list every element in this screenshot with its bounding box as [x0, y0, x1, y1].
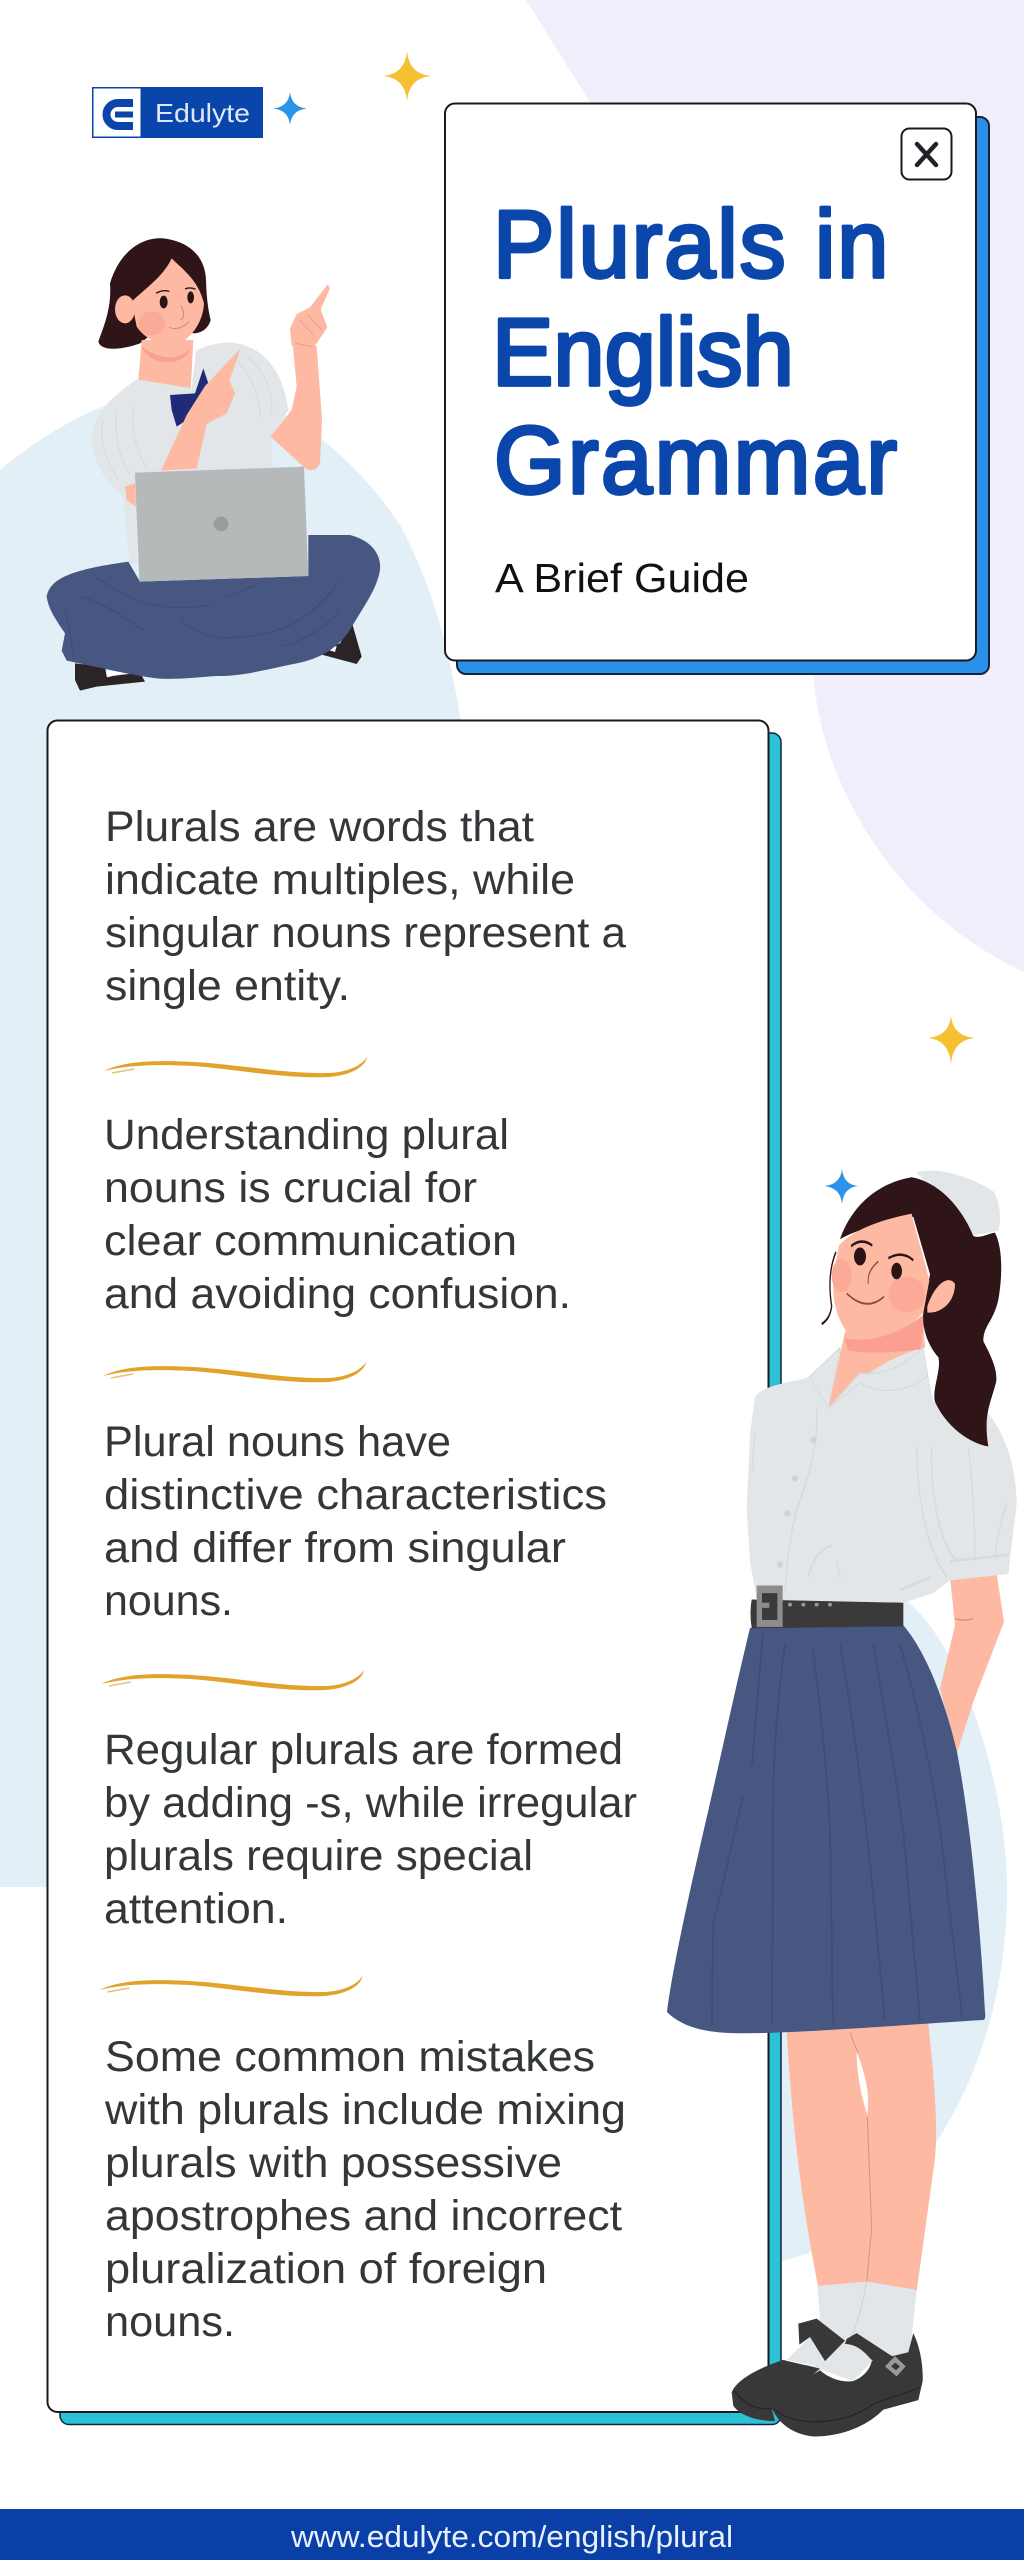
- blush: [138, 311, 165, 335]
- text block 2: and avoiding confusion.: [104, 1270, 571, 1318]
- icon: yellow sparkle right: [928, 1016, 975, 1064]
- right shoe: [319, 622, 362, 664]
- background: lavender blob: [526, 0, 1024, 972]
- text block 4: by adding -s, while irregular: [104, 1779, 637, 1827]
- illustration: standing girl: [667, 1171, 1017, 2436]
- title: [492, 190, 897, 513]
- pointing arm: [161, 348, 241, 471]
- tie: [170, 368, 208, 427]
- divider 4: [100, 1976, 362, 1996]
- arm: [940, 1574, 1004, 1754]
- text block 5: pluralization of foreign: [105, 2245, 547, 2293]
- ear: [115, 295, 135, 323]
- text block 3: nouns.: [104, 1577, 233, 1625]
- title: Grammar: [494, 406, 897, 513]
- text block 1: [105, 803, 626, 1010]
- text block 1: Plurals are words that: [105, 803, 534, 851]
- title card: [445, 104, 976, 660]
- nose and mouth: [847, 1261, 884, 1304]
- text block 4: attention.: [104, 1885, 288, 1933]
- skirt: [47, 535, 380, 679]
- text block 3: distinctive characteristics: [104, 1471, 607, 1519]
- divider 2: [103, 1362, 366, 1382]
- hair back: [98, 238, 211, 349]
- raised arm: [271, 343, 322, 470]
- blush: [832, 1259, 852, 1292]
- skirt: [667, 1625, 985, 2033]
- text block 2: Understanding plural: [104, 1111, 509, 1159]
- buttons: [777, 1437, 816, 1568]
- icon: close button: [902, 128, 952, 180]
- shoe buckle: [885, 2356, 906, 2376]
- text block 5: nouns.: [105, 2298, 235, 2346]
- title: English: [492, 298, 794, 405]
- text block 1: single entity.: [105, 962, 350, 1010]
- text block 5: with plurals include mixing: [104, 2086, 626, 2134]
- neck: [138, 340, 193, 390]
- text block 3: and differ from singular: [104, 1524, 566, 1572]
- footer bar: [0, 2509, 1024, 2560]
- neck: [828, 1325, 925, 1408]
- strap back: [798, 2319, 845, 2361]
- eyes: [160, 296, 168, 308]
- strap front: [845, 2333, 907, 2383]
- laptop: [135, 467, 308, 582]
- text block 2: [104, 1111, 571, 1318]
- icon: yellow sparkle top: [383, 51, 431, 101]
- text block 5: apostrophes and incorrect: [105, 2192, 622, 2240]
- title card shadow: [457, 117, 989, 674]
- eyes: [854, 1247, 866, 1265]
- footer url: www.edulyte.com/english/plural: [290, 2519, 733, 2554]
- illustration: girl with laptop: [47, 238, 380, 691]
- hair strand: [822, 1252, 836, 1324]
- title: Plurals in: [493, 190, 888, 297]
- logo: Edulyte: [92, 87, 263, 138]
- icon: blue sparkle near logo: [273, 92, 307, 125]
- ear: [927, 1280, 955, 1313]
- text block 4: plurals require special: [104, 1832, 533, 1880]
- subtitle: A Brief Guide: [495, 555, 749, 601]
- belt buckle: [757, 1586, 783, 1627]
- background: left light blue blob: [0, 390, 462, 1887]
- skirt pleats: [712, 1631, 962, 2025]
- back shoe: [732, 2360, 820, 2421]
- text block 2: nouns is crucial for: [104, 1164, 477, 1212]
- legs and shoes: [732, 2023, 936, 2436]
- collar: [828, 1348, 927, 1408]
- text block 3: [104, 1418, 607, 1625]
- socks: [787, 2281, 917, 2381]
- face: [132, 258, 204, 345]
- divider 3: [101, 1670, 364, 1690]
- text block 5: [104, 2033, 626, 2346]
- text block 4: [104, 1726, 637, 1933]
- main panel shadow: [60, 733, 781, 2424]
- text block 1: singular nouns represent a: [105, 909, 626, 957]
- front shoe: [772, 2333, 923, 2436]
- belt: [750, 1600, 903, 1628]
- face: [833, 1214, 929, 1337]
- logo: Edulyte: Edulyte: [155, 98, 250, 128]
- text block 5: plurals with possessive: [105, 2139, 562, 2187]
- text block 1: indicate multiples, while: [105, 856, 575, 904]
- hair ribbon: [917, 1171, 1000, 1236]
- hair: [840, 1177, 1001, 1446]
- left shoe: [75, 663, 145, 691]
- text block 4: Regular plurals are formed: [104, 1726, 623, 1774]
- shirt folds: [753, 1408, 1008, 1593]
- shirt: [92, 343, 288, 563]
- icon: blue sparkle right: [824, 1169, 858, 1204]
- text block 5: Some common mistakes: [105, 2033, 595, 2081]
- main panel: [48, 720, 768, 2412]
- shirt: [747, 1348, 1017, 1603]
- raised hand: [290, 284, 330, 348]
- text block 3: Plural nouns have: [104, 1418, 451, 1466]
- text block 2: clear communication: [104, 1217, 517, 1265]
- background: right light blue blob: [775, 1596, 1007, 2263]
- divider 1: [104, 1057, 367, 1077]
